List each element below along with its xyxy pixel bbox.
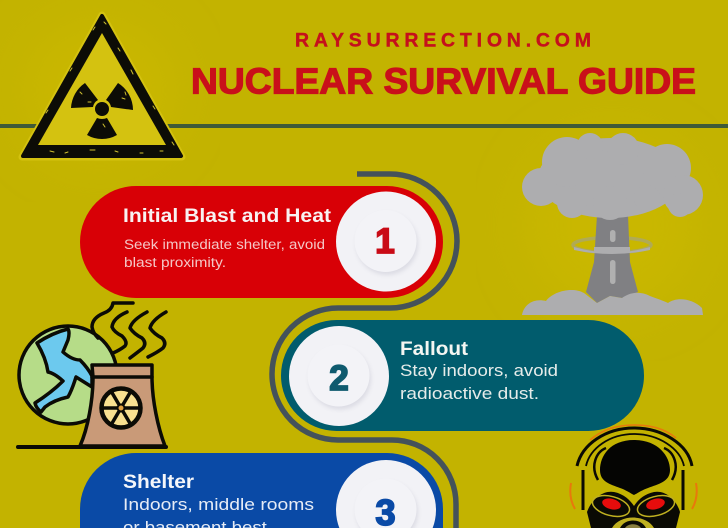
mushroom cap — [522, 133, 703, 220]
step 2 description: radioactive dust. — [400, 384, 539, 403]
step 1 description: Seek immediate shelter, avoid — [124, 237, 325, 252]
eyes — [601, 497, 622, 511]
panel: step 2 — [281, 320, 644, 431]
skull face — [587, 492, 680, 528]
step 3 description: Indoors, middle rooms — [123, 495, 314, 514]
panel: step 3 — [80, 453, 443, 528]
step 2 badge — [289, 326, 389, 426]
blast ring back — [573, 238, 651, 252]
steam — [92, 303, 166, 358]
panel: step 1 — [80, 186, 443, 298]
step 3 badge — [336, 460, 436, 528]
step 1 description: blast proximity. — [124, 255, 226, 270]
cooling tower — [80, 365, 165, 446]
icon: earth and nuclear plant — [18, 303, 166, 447]
header divider line — [0, 124, 728, 128]
step 2 description — [400, 361, 558, 403]
skull dome — [600, 440, 670, 495]
connector: serpentine line — [272, 174, 457, 528]
number 2: 2 — [329, 359, 349, 398]
icon: radiation warning triangle — [22, 15, 182, 157]
heading: title: NUCLEAR SURVIVAL GUIDE — [191, 60, 696, 102]
step 1 badge — [336, 192, 436, 292]
step 2 description: Stay indoors, avoid — [400, 361, 558, 380]
step 1 heading: Initial Blast and Heat — [123, 206, 332, 227]
step 1 description — [124, 237, 325, 270]
ear cups — [582, 470, 584, 510]
nose — [612, 518, 654, 528]
reactor symbol — [102, 388, 140, 428]
headphone band — [590, 425, 676, 440]
icon: mushroom cloud — [522, 133, 703, 315]
step 3 description — [123, 495, 314, 528]
mushroom stem — [586, 215, 638, 303]
ground line — [18, 445, 166, 449]
icon: skull with headphones — [570, 425, 697, 528]
number 1: 1 — [375, 222, 395, 261]
ground dust — [522, 290, 703, 315]
heading: site name: RAYSURRECTION.COM — [295, 30, 591, 52]
blast ring front — [574, 247, 650, 254]
step 2 heading: Fallout — [400, 339, 469, 360]
earth globe — [19, 326, 117, 424]
step 3 heading: Shelter — [123, 472, 195, 493]
